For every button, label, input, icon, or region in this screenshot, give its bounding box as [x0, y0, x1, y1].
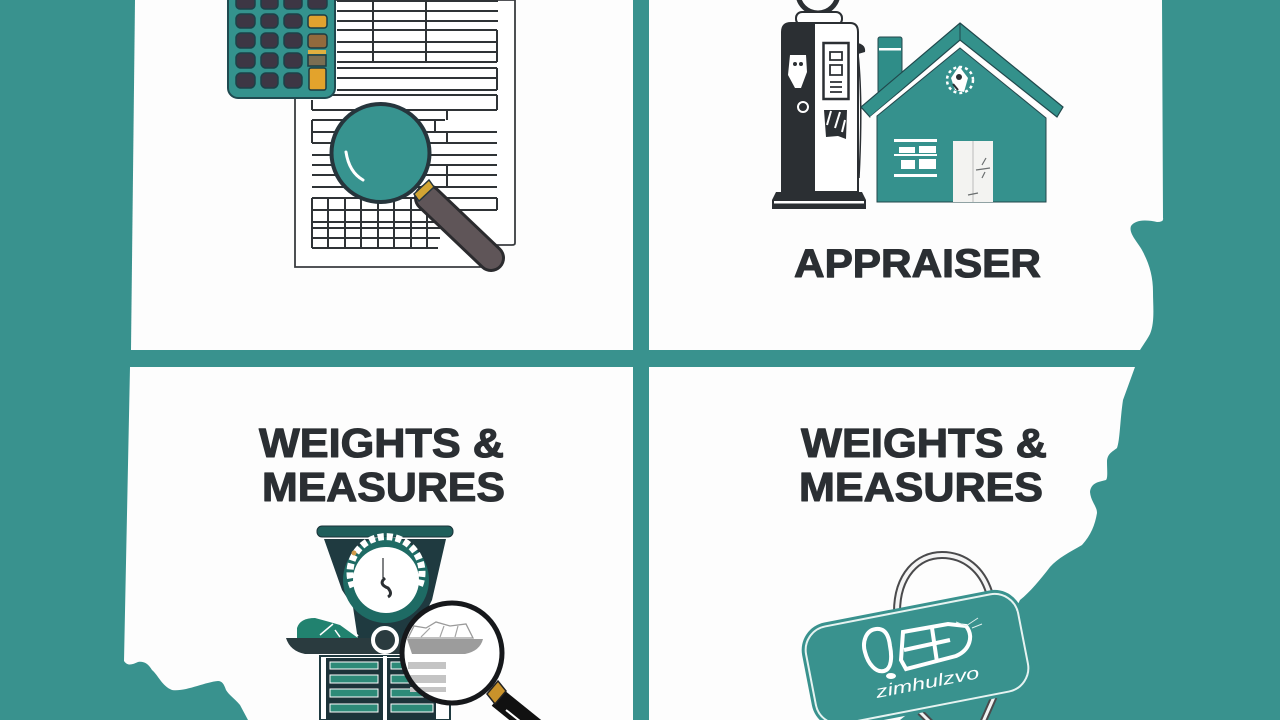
heading: weights and measures: [259, 420, 505, 510]
ring: [897, 555, 994, 720]
center knob: [373, 628, 397, 652]
heading: weights and measures: [799, 420, 1047, 510]
pan: [286, 638, 483, 654]
scale top bar: [317, 526, 453, 537]
document sheets: [295, 0, 515, 267]
tag logo: [864, 624, 970, 671]
roof: [861, 23, 1063, 117]
pump display: [824, 43, 848, 99]
magnifier collar: [487, 681, 506, 704]
magnifier handle: [498, 698, 550, 720]
icon: tag with ring: [797, 555, 1037, 720]
panel: bottom left, weights and measures: [124, 367, 633, 720]
dial: [343, 537, 429, 623]
icon: mechanical scale: [286, 526, 550, 720]
heading: weights and measures: WEIGHTS &: [801, 420, 1047, 466]
heading: weights and measures: MEASURES: [799, 464, 1043, 510]
heading: appraiser: APPRAISER: [794, 242, 1041, 286]
icon: gas pump: [772, 0, 866, 209]
window: [894, 139, 937, 177]
magnifier lens: [332, 104, 430, 202]
pump base: [772, 192, 866, 209]
panel: top left, calculator and document: [131, 0, 633, 350]
scale stand: [320, 656, 450, 720]
scale body: [324, 539, 446, 640]
heading: weights and measures: WEIGHTS &: [259, 420, 504, 466]
roof ornament: [947, 66, 973, 93]
tag body: [797, 585, 1037, 720]
table lines: [312, 0, 498, 248]
icon: document with table and magnifier: [295, 0, 515, 267]
magnifier collar: [414, 180, 434, 201]
icon: calculator: [228, 0, 335, 98]
panel: top right, appraiser: [649, 0, 1163, 350]
magnifier over scale: [402, 603, 550, 720]
heading: weights and measures: MEASURES: [262, 464, 505, 510]
icon: house: [861, 23, 1063, 202]
magnifier handle: [428, 198, 491, 258]
tag caption: zimhulzvo: [873, 663, 981, 702]
left pan produce: [297, 618, 358, 638]
panel: bottom right, weights and measures: [649, 367, 1135, 720]
door: [953, 141, 993, 202]
